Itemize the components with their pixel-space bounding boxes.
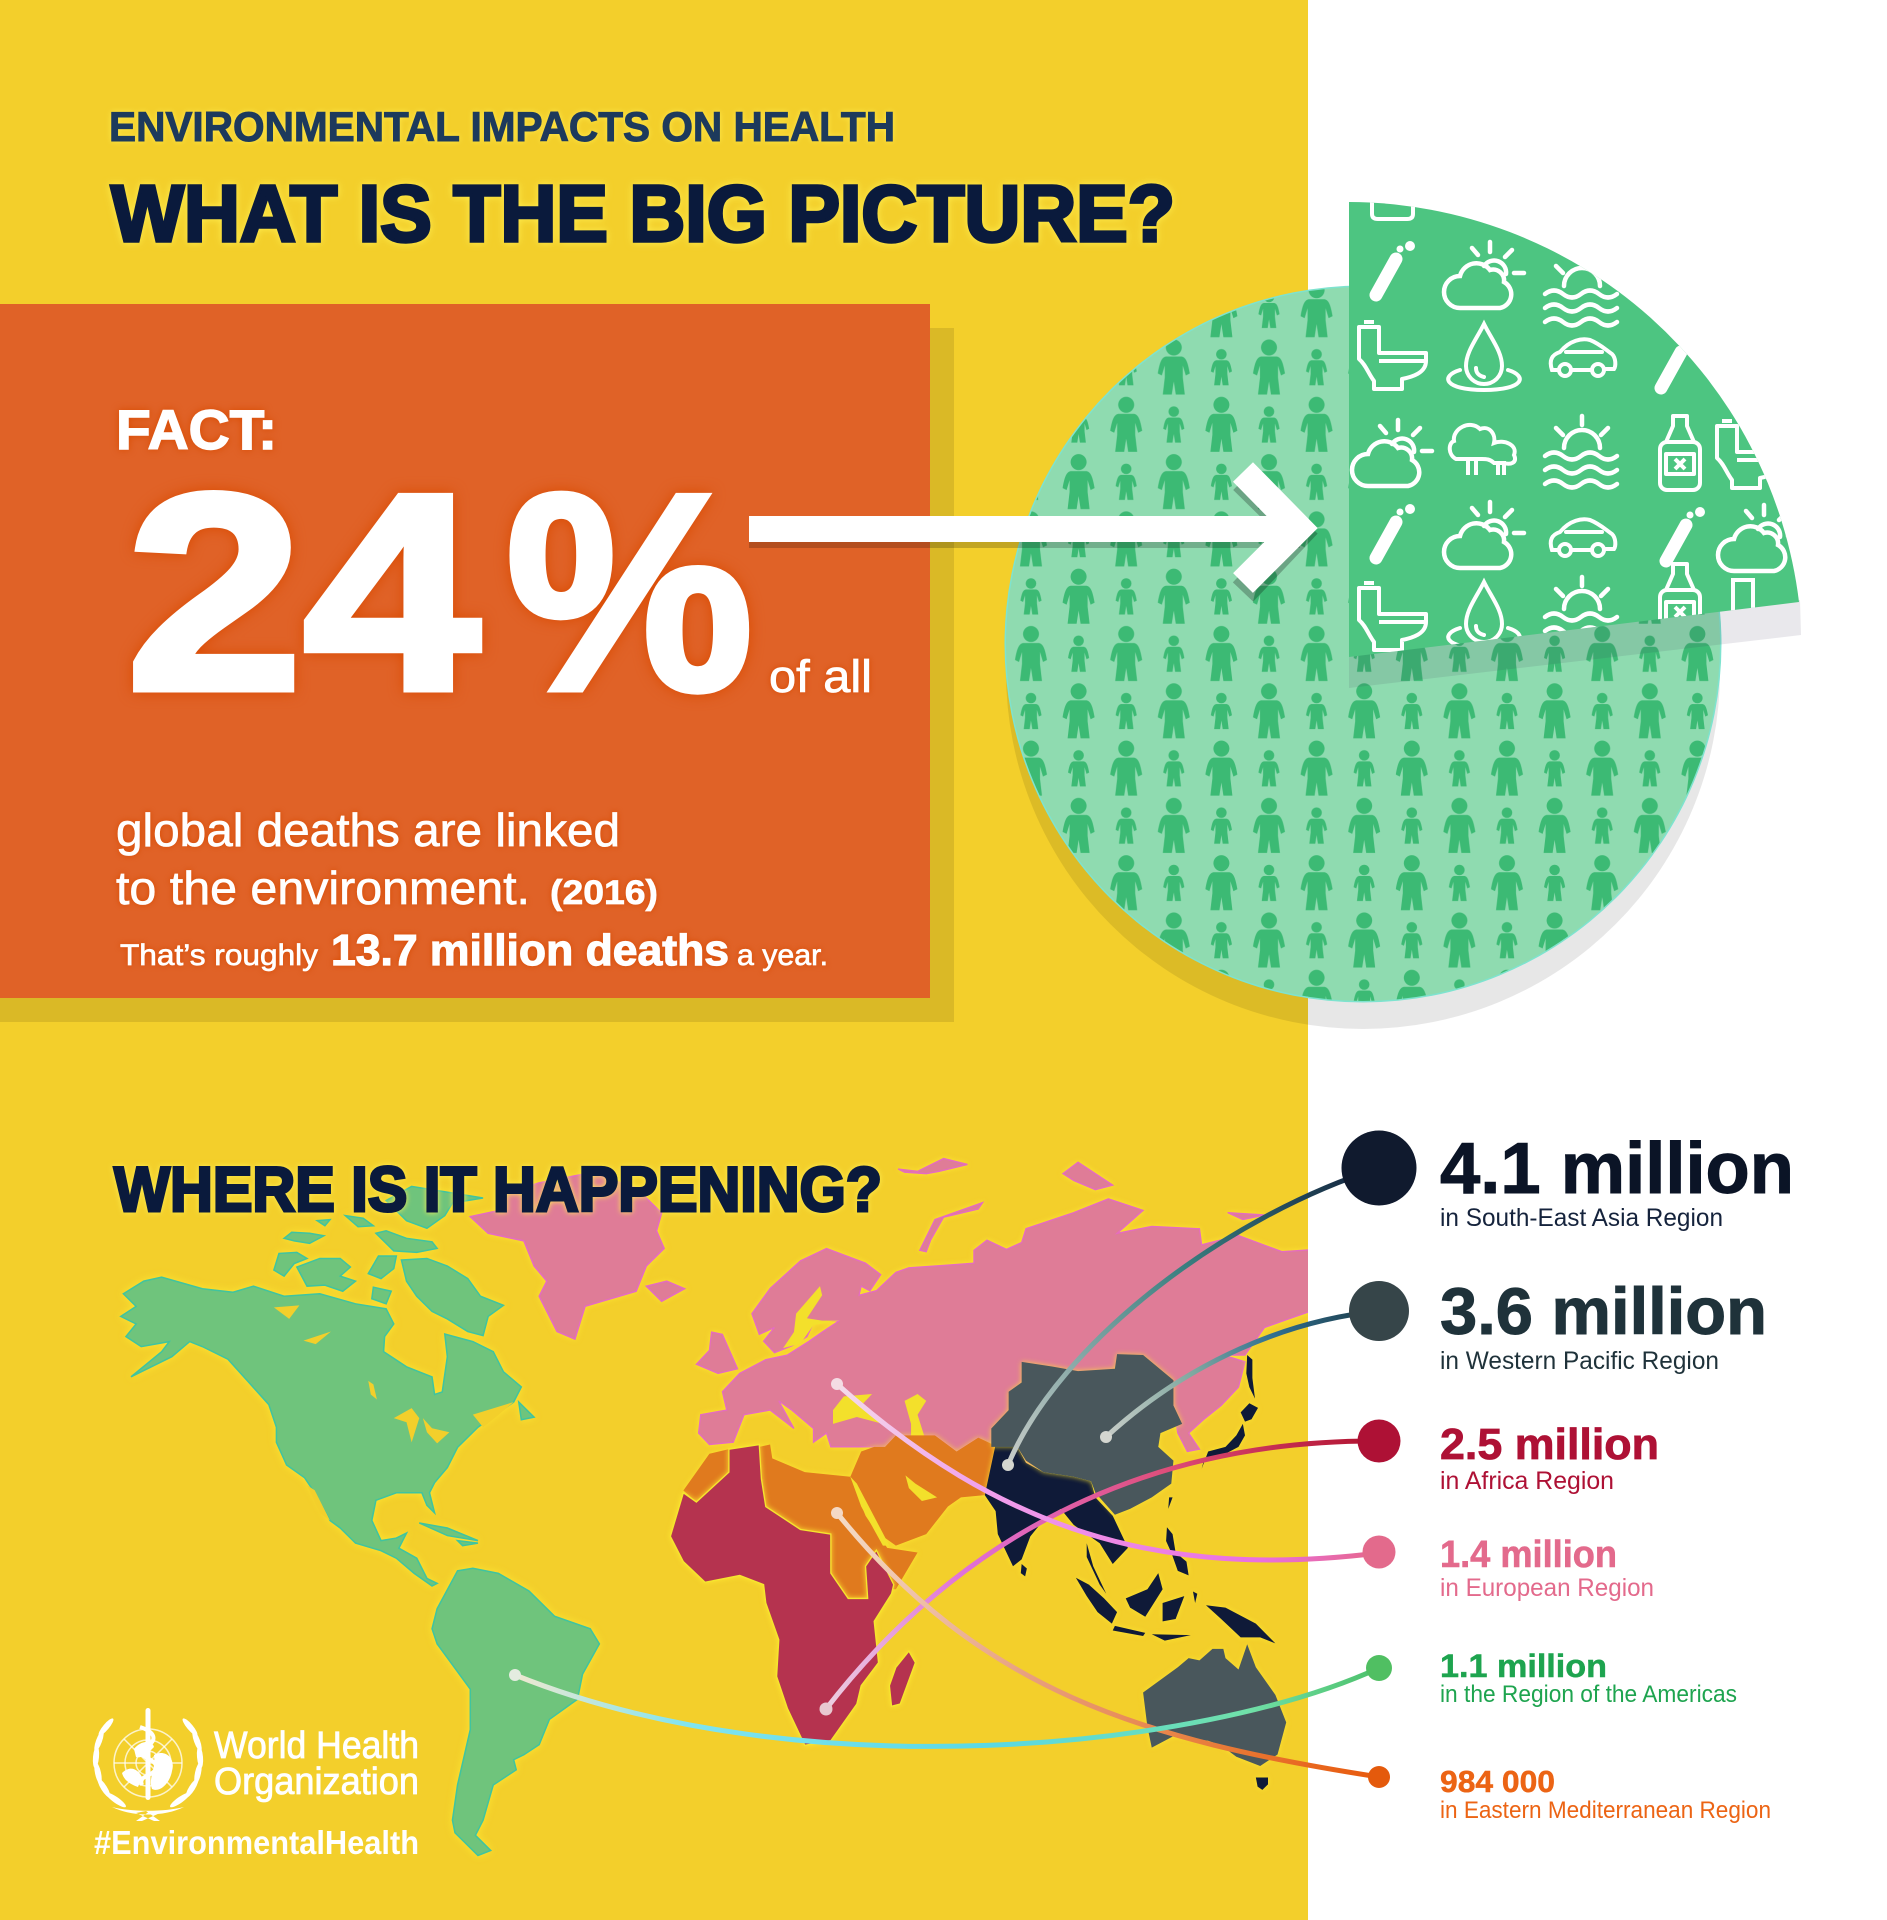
map: gulf and Red Sea [850, 1475, 937, 1546]
statement text: global deaths are linked [116, 804, 620, 856]
map: Africa, coloured crimson [670, 1445, 915, 1745]
map: Americas, coloured green [121, 1186, 599, 1855]
big statistic: 24 [126, 437, 482, 749]
heading: section label: ENVIRONMENTAL IMPACTS ON HEALTH [109, 103, 895, 150]
background: yellow panel [0, 0, 1308, 1920]
legend: South-East Asia [1342, 1129, 1794, 1232]
legend: South-East Asia: in South-East Asia Region [1440, 1204, 1723, 1232]
statement text [116, 804, 828, 975]
legend: Africa [1358, 1420, 1659, 1495]
logo text: World Health Organization [214, 1725, 419, 1803]
big statistic: % [506, 437, 753, 749]
logo text: World Health Organization: World Health [214, 1725, 419, 1767]
legend: Western Pacific: in Western Pacific Region [1440, 1347, 1719, 1375]
of all: of all [769, 651, 872, 702]
legend: Eastern Mediterranean [1368, 1764, 1771, 1824]
legend: European [1362, 1534, 1654, 1602]
legend: South-East Asia: 4.1 million [1440, 1129, 1794, 1209]
connector: Western Pacific [1100, 1311, 1379, 1443]
legend: Eastern Mediterranean: in Eastern Mediterranean Region [1440, 1797, 1771, 1824]
icon: WHO emblem [92, 1708, 204, 1821]
connector: South-East Asia [1002, 1168, 1379, 1471]
legend: Africa: 2.5 million [1440, 1420, 1659, 1469]
legend: European: 1.4 million [1440, 1534, 1617, 1576]
map: Eastern Mediterranean, coloured orange [683, 1435, 998, 1598]
map: lakes in North America [274, 1305, 514, 1520]
statement text: (2016) [550, 874, 658, 912]
panel: fact box shadow [0, 328, 954, 1022]
legend: Africa: in Africa Region [1440, 1467, 1614, 1495]
arrow from statistic to slice [749, 472, 1300, 592]
title: map section: WHERE IS IT HAPPENING? [114, 1155, 882, 1225]
map: Eurasia, coloured pink [696, 1158, 1317, 1479]
connector: Eastern Mediterranean [831, 1507, 1379, 1777]
legend: European: in European Region [1440, 1574, 1654, 1602]
map: Western Pacific, coloured slate [991, 1354, 1286, 1766]
legend: Americas: 1.1 million [1440, 1648, 1607, 1684]
panel: fact box [0, 304, 930, 998]
map: Greenland and Iceland, coloured pink [470, 1173, 685, 1339]
statement text: a year. [737, 939, 828, 972]
map: South-East Asia, coloured navy [985, 1355, 1275, 1790]
legend: Western Pacific [1349, 1274, 1767, 1375]
title: WHAT IS THE BIG PICTURE? [111, 169, 1175, 258]
connector: Europe [831, 1378, 1379, 1560]
legend: Americas [1366, 1648, 1737, 1708]
legend: Americas: in the Region of the Americas [1440, 1681, 1737, 1708]
logo text: World Health Organization: Organization [214, 1761, 419, 1803]
map: inland seas of Eurasia [783, 1286, 926, 1442]
statement text: That’s roughly [120, 939, 318, 972]
fact label: FACT: [116, 398, 277, 461]
pie chart: slice shadow [1349, 600, 1801, 688]
statement text: to the environment. [116, 862, 530, 914]
legend: Western Pacific: 3.6 million [1440, 1274, 1767, 1348]
hashtag: #EnvironmentalHealth [94, 1824, 419, 1861]
statement text: 13.7 million deaths [331, 926, 729, 975]
pie chart: 24% slice with environmental icons [1349, 200, 1799, 657]
connector: Americas [509, 1668, 1379, 1746]
connector: Africa [820, 1441, 1379, 1716]
legend: Eastern Mediterranean: 984 000 [1440, 1764, 1555, 1799]
pie chart: whole circle with people pattern [1004, 286, 1722, 1029]
world map [121, 1158, 1317, 1855]
